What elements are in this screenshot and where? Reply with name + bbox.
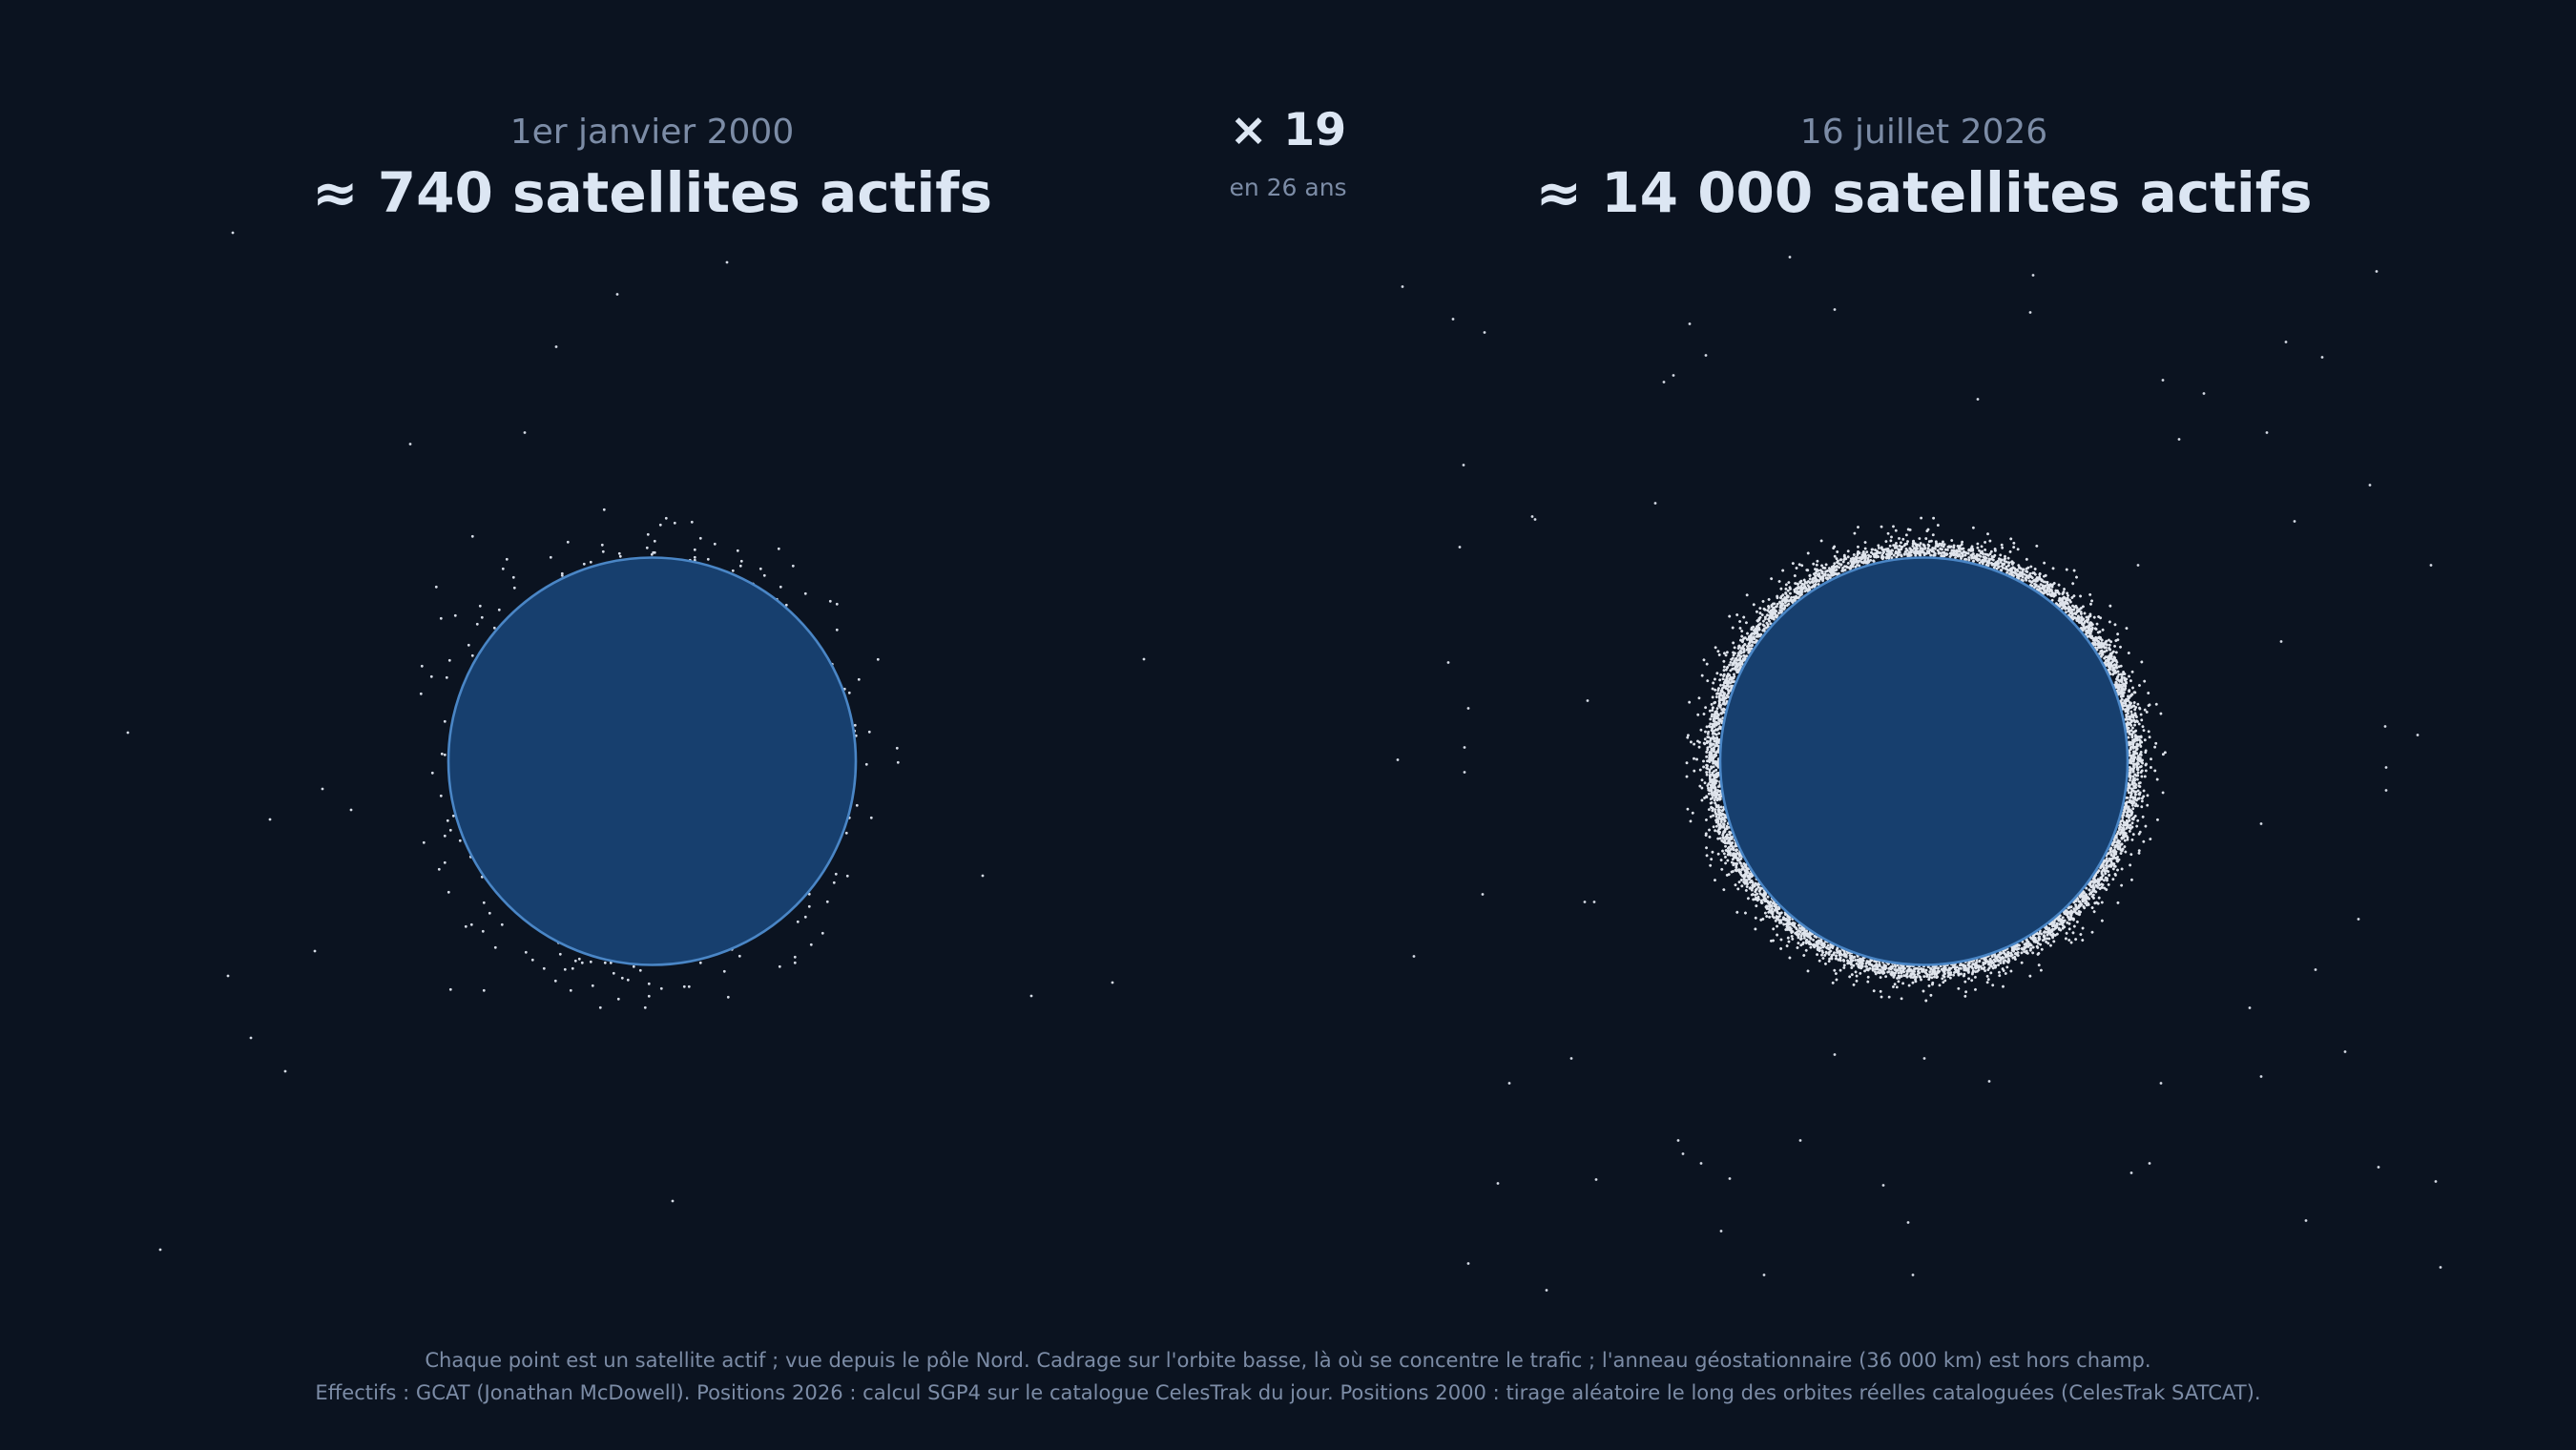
multiplier period: en 26 ans: [1229, 174, 1347, 201]
satellite dots 2000: [128, 233, 1144, 1250]
panel: January 2000 constellation: [128, 233, 1144, 1250]
footer notes: [315, 1348, 2261, 1404]
heading: multiplier: [1229, 104, 1347, 201]
count 2000: ≈ 740 satellites actifs: [312, 160, 992, 225]
satellite ring 2026: [1683, 518, 2166, 1001]
heading: 2000: [312, 113, 992, 225]
footer line 1: Chaque point est un satellite actif ; vue depuis le pôle Nord. Cadrage sur l'orbite basse, là où se concentre le trafic ; l'anneau géostationnaire (36 000 km) est hors champ.: [425, 1348, 2151, 1372]
footer line 2: Effectifs : GCAT (Jonathan McDowell). Positions 2026 : calcul SGP4 sur le catalogue CelesTrak du jour. Positions 2000 : tirage aléatoire le long des orbites réelles cataloguées (CelesTrak SATCAT).: [315, 1380, 2261, 1404]
earth 2000: [448, 557, 856, 965]
earth 2026: [1720, 557, 2128, 965]
multiplier value: × 19: [1230, 104, 1346, 156]
date 2026: 16 juillet 2026: [1800, 113, 2047, 152]
date 2000: 1er janvier 2000: [510, 113, 794, 152]
scattered satellite dots 2026: [1398, 258, 2441, 1290]
heading: 2026: [1536, 113, 2312, 225]
count 2026: ≈ 14 000 satellites actifs: [1536, 160, 2312, 225]
panel: July 2026 constellation: [1398, 258, 2441, 1290]
